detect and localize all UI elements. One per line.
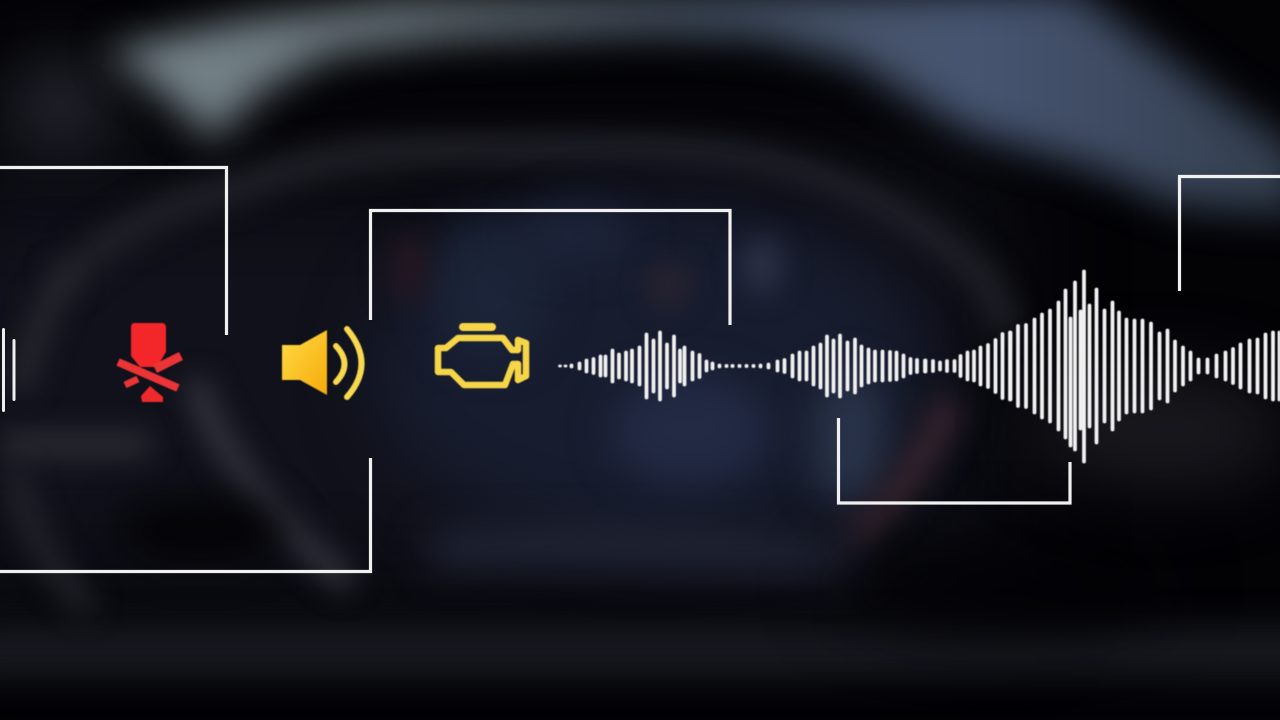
- frame: lower right bracket: [838, 418, 1070, 503]
- frame: centre top bracket: [370, 210, 730, 325]
- icon: seatbelt warning: [118, 323, 181, 402]
- frame: top right bracket: [1180, 176, 1280, 291]
- waveform: audio bars: [558, 270, 1280, 463]
- waveform: left fragment: [2, 328, 16, 412]
- frame: top left bracket: [0, 168, 226, 335]
- frame: lower left bracket: [0, 458, 370, 572]
- icon: speaker: [282, 329, 362, 397]
- icon: check engine: [438, 327, 526, 385]
